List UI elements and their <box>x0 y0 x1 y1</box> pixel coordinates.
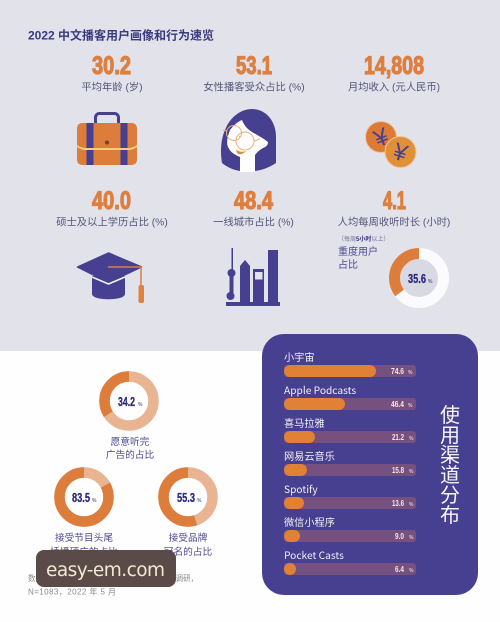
source note second line: N=1083，2022 年 5 月 <box>28 586 116 596</box>
label: head and tail ads <box>50 531 118 558</box>
channel: Spotify: Spotify <box>284 481 318 496</box>
donut: heavy users 35.6%: 35.6 <box>408 272 426 286</box>
donut: willing to finish ads 34.2%: % <box>138 402 143 408</box>
icon: graduation cap <box>78 253 144 303</box>
heavy user label: 重度用户 <box>338 245 378 258</box>
channel: 微信小程序 <box>284 514 416 542</box>
vertical heading: 用 <box>440 425 460 447</box>
channel: Apple Podcasts <box>284 382 416 410</box>
stat: master degree or above: 硕士及以上学历占比 (%) <box>56 216 168 228</box>
label: head and tail ads: 插播硬广的占比 <box>50 545 118 558</box>
channel: 微信小程序: 9.0 <box>395 532 404 541</box>
watermark <box>36 550 176 587</box>
vertical heading: 布 <box>440 504 460 527</box>
channel: Spotify <box>284 481 416 509</box>
stat: monthly income <box>348 52 440 94</box>
channel: 小宇宙: 74.6 <box>391 367 404 376</box>
channel: 喜马拉雅: 喜马拉雅 <box>284 415 325 430</box>
vertical heading <box>440 404 460 527</box>
donut: willing to finish ads 34.2% <box>104 376 154 426</box>
icon: city skyline <box>226 248 280 306</box>
channel: 喜马拉雅 <box>284 415 416 443</box>
donut: accept brand naming 55.3%: 55.3 <box>177 491 195 505</box>
stat: monthly income: 月均收入 (元人民币) <box>348 80 440 94</box>
icon: briefcase <box>77 114 137 165</box>
stat: average age: 30.2 <box>92 52 131 80</box>
channel: 网易云音乐: 网易云音乐 <box>284 448 335 463</box>
icon: woman with glasses <box>221 109 276 172</box>
watermark: easy-em.com <box>46 560 165 581</box>
donut: accept head and tail ads 83.5% <box>60 472 108 522</box>
channel: Pocket Casts <box>284 547 416 575</box>
channel: 小宇宙: 小宇宙 <box>284 349 315 364</box>
donut: accept brand naming 55.3% <box>164 472 212 522</box>
title: 2022 中文播客用户画像和行为速览 <box>28 28 214 42</box>
channel: 网易云音乐: % <box>409 469 414 475</box>
channel: Pocket Casts: Pocket Casts <box>284 547 344 562</box>
stat: average age <box>81 52 143 94</box>
donut: heavy users 35.6%: % <box>428 279 433 285</box>
stat: monthly income: 14,808 <box>364 52 424 80</box>
channel: Pocket Casts: % <box>409 568 414 574</box>
channel: 喜马拉雅: % <box>409 436 414 442</box>
channel: 喜马拉雅: 21.2 <box>392 433 404 442</box>
stat: tier one cities: 一线城市占比 (%) <box>213 216 294 228</box>
stat: weekly listening <box>338 187 450 228</box>
panel: channel distribution <box>262 334 478 595</box>
label: finish ads: 广告的占比 <box>106 448 155 461</box>
channel: Apple Podcasts: % <box>408 403 413 409</box>
channel: 小宇宙: % <box>408 370 413 376</box>
label: finish ads <box>106 435 155 461</box>
channel: 小宇宙 <box>284 349 416 377</box>
channel: 微信小程序: 微信小程序 <box>284 514 335 529</box>
stat: weekly listening: 4.1 <box>383 187 406 215</box>
label: brand naming <box>164 531 213 558</box>
channel: Spotify: % <box>409 502 414 508</box>
stat: tier one cities <box>213 187 294 228</box>
channel: Spotify: 13.6 <box>392 499 404 508</box>
stat: master degree or above: 40.0 <box>92 187 131 215</box>
stat: female audience <box>203 52 305 94</box>
channel: Apple Podcasts: Apple Podcasts <box>284 382 356 397</box>
donut: accept brand naming 55.3%: % <box>197 498 202 504</box>
label: finish ads: 愿意听完 <box>111 435 150 448</box>
icon: yuan coins: ¥ <box>369 123 393 153</box>
heavy user label: 占比 <box>338 258 358 271</box>
donut: accept head and tail ads 83.5%: 83.5 <box>72 491 90 505</box>
heavy user label <box>338 235 389 271</box>
channel: 网易云音乐: 15.8 <box>392 466 404 475</box>
icon: yuan coins: ¥ <box>389 138 411 168</box>
source note: 数据来源：JustPod《中文播客新观察》用户调研， <box>28 573 198 583</box>
vertical heading: 渠 <box>440 444 460 467</box>
donut: accept head and tail ads 83.5%: % <box>92 498 97 504</box>
stat: female audience: 女性播客受众占比 (%) <box>203 80 305 94</box>
channel: Apple Podcasts: 46.4 <box>391 400 404 409</box>
channel: 网易云音乐 <box>284 448 416 476</box>
vertical heading: 使 <box>440 404 460 427</box>
donut: willing to finish ads 34.2%: 34.2 <box>118 395 135 409</box>
donut: heavy users 35.6% <box>394 254 444 302</box>
top background panel <box>0 0 500 351</box>
heavy user label: （每周5小时以上） <box>338 235 389 243</box>
vertical heading: 道 <box>440 464 460 487</box>
stat: tier one cities: 48.4 <box>234 187 273 215</box>
label: head and tail ads: 接受节目头尾 <box>55 531 113 544</box>
stat: average age: 平均年龄 (岁) <box>81 80 143 94</box>
label: brand naming: 接受品牌 <box>169 531 208 544</box>
channel: Pocket Casts: 6.4 <box>395 565 404 574</box>
vertical heading: 分 <box>440 484 460 507</box>
channel: 微信小程序: % <box>409 535 414 541</box>
stat: master degree or above <box>56 187 168 228</box>
label: brand naming: 冠名的占比 <box>164 545 213 558</box>
stat: weekly listening: 人均每周收听时长 (小时) <box>338 216 450 228</box>
stat: female audience: 53.1 <box>236 52 272 80</box>
icon: yuan coins <box>366 122 416 168</box>
